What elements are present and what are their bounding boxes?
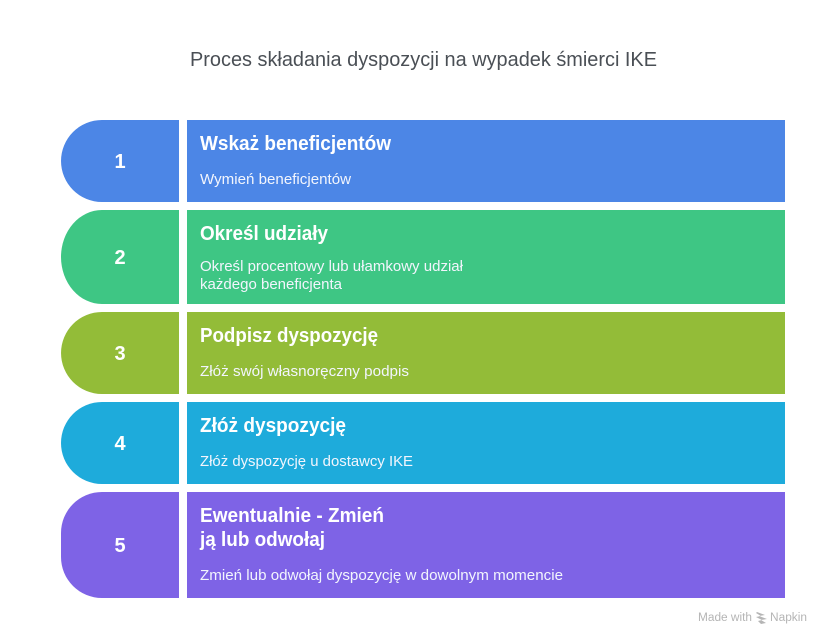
step 3 panel bbox=[187, 312, 785, 394]
title: Proces składania dyspozycji na wypadek śmierci IKE bbox=[190, 49, 657, 71]
step 4 panel bbox=[187, 402, 785, 484]
step 2 panel bbox=[187, 210, 785, 304]
step 5 panel: Zmień lub odwołaj dyspozycję w dowolnym momencie bbox=[200, 568, 563, 584]
step 2 bbox=[61, 210, 785, 304]
step 1 panel: Wymień beneficjentów bbox=[200, 172, 352, 188]
step 5 number tab: 5 bbox=[114, 535, 126, 557]
watermark: Made with Napkin: Napkin bbox=[770, 612, 807, 624]
step 1 panel bbox=[187, 120, 785, 202]
step 5 number tab bbox=[61, 492, 179, 598]
step 1 panel: Wskaż beneficjentów bbox=[200, 133, 391, 155]
step 5 panel: Ewentualnie - Zmień bbox=[200, 505, 384, 527]
step 3 number tab: 3 bbox=[114, 343, 126, 365]
step 2 panel: Określ procentowy lub ułamkowy udział bbox=[200, 259, 464, 275]
step 3 panel: Podpisz dyspozycję bbox=[200, 325, 378, 347]
step 3 panel: Złóż swój własnoręczny podpis bbox=[200, 364, 409, 380]
step 3 bbox=[61, 312, 785, 394]
step 4 bbox=[61, 402, 785, 484]
step 2 number tab: 2 bbox=[114, 247, 126, 269]
icon: Napkin logo bbox=[756, 612, 767, 624]
step 4 panel: Złóż dyspozycję u dostawcy IKE bbox=[200, 454, 413, 470]
step 3 number tab bbox=[61, 312, 179, 394]
step 4 number tab: 4 bbox=[114, 433, 126, 455]
step 5 panel bbox=[187, 492, 785, 598]
step 2 number tab bbox=[61, 210, 179, 304]
step 2 panel: Określ udziały bbox=[200, 223, 329, 245]
watermark: Made with Napkin bbox=[698, 612, 807, 624]
step 4 number tab bbox=[61, 402, 179, 484]
step 5 bbox=[61, 492, 785, 598]
step 2 panel: każdego beneficjenta bbox=[200, 277, 343, 293]
step 4 panel: Złóż dyspozycję bbox=[200, 415, 346, 437]
step 1 number tab: 1 bbox=[114, 151, 126, 173]
watermark: Made with Napkin: Made with bbox=[698, 612, 752, 624]
step 1 number tab bbox=[61, 120, 179, 202]
step 1 bbox=[61, 120, 785, 202]
step 5 panel: ją lub odwołaj bbox=[199, 529, 325, 551]
